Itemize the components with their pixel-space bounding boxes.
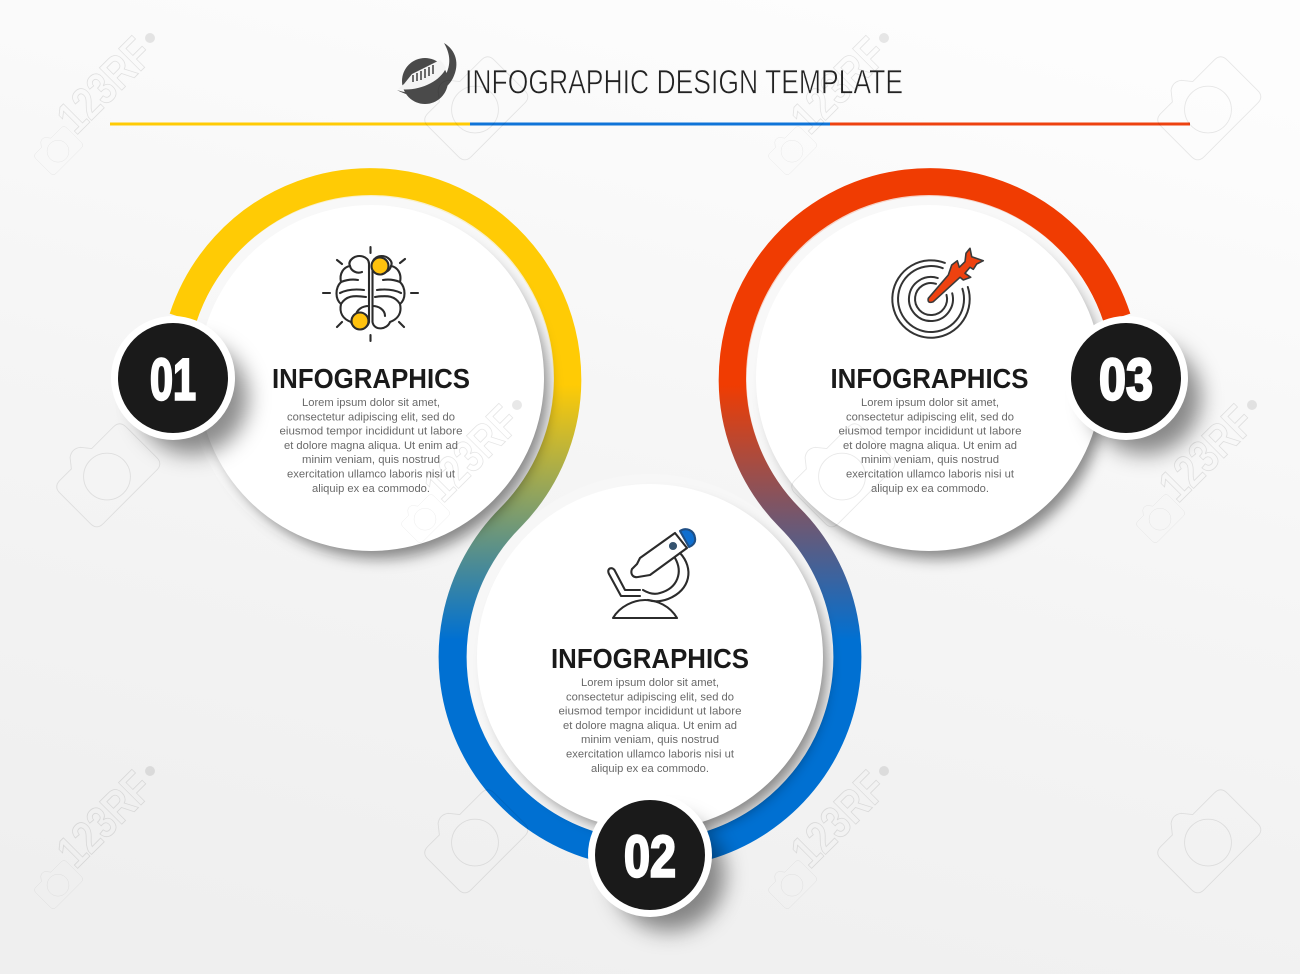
body text 2: aliquip ex ea commodo. (591, 763, 709, 775)
body text 3: exercitation ullamco laboris nisi ut (846, 468, 1015, 480)
number badge 01 (111, 316, 248, 454)
panel 2: disc (467, 474, 833, 840)
header logo icon (397, 43, 456, 104)
body text 1 (280, 397, 462, 495)
icon: brain (323, 247, 418, 341)
body text 1: minim veniam, quis nostrud (302, 454, 440, 466)
number badge 03: 03 (1099, 348, 1153, 412)
body text 3: aliquip ex ea commodo. (871, 483, 989, 495)
stock watermarks: 123RF (46, 761, 162, 877)
number badge 02 (588, 793, 725, 931)
body text 2: Lorem ipsum dolor sit amet, (581, 677, 719, 689)
body text 2: minim veniam, quis nostrud (581, 734, 719, 746)
body text 1: exercitation ullamco laboris nisi ut (287, 468, 456, 480)
panel 3 text (830, 363, 1028, 495)
stock watermarks: 123RF (413, 395, 529, 511)
stock watermarks: 123RF (1148, 395, 1264, 511)
panel 2 text (551, 643, 749, 775)
panel 1 text (272, 363, 470, 495)
body text 2: consectetur adipiscing elit, sed do (566, 691, 734, 703)
body text 3: consectetur adipiscing elit, sed do (846, 411, 1014, 423)
body text 1: eiusmod tempor incididunt ut labore (280, 426, 462, 438)
panel 3: disc (746, 195, 1112, 561)
body text 3: eiusmod tempor incididunt ut labore (838, 426, 1022, 438)
number badge 01: 01 (150, 348, 196, 412)
stock watermarks: 123RF (780, 27, 896, 143)
panel 1: disc (188, 195, 554, 561)
stock watermarks: 123RF (46, 27, 162, 143)
body text 1: aliquip ex ea commodo. (312, 483, 430, 495)
heading 1: INFOGRAPHICS (272, 363, 470, 394)
body text 2: exercitation ullamco laboris nisi ut (566, 748, 735, 760)
icon: target with arrow (892, 248, 983, 338)
body text 1: Lorem ipsum dolor sit amet, (302, 397, 440, 409)
stock watermarks: 123RF (780, 761, 896, 877)
title: INFOGRAPHIC DESIGN TEMPLATE (465, 64, 903, 102)
number badge 03 (1064, 316, 1201, 454)
body text 3: et dolore magna aliqua. Ut enim ad (843, 440, 1017, 452)
heading 3: INFOGRAPHICS (830, 363, 1028, 394)
body text 3: minim veniam, quis nostrud (861, 454, 999, 466)
header tri-colour rule (110, 122, 1190, 126)
body text 2: et dolore magna aliqua. Ut enim ad (563, 720, 737, 732)
body text 1: consectetur adipiscing elit, sed do (287, 411, 455, 423)
body text 3: Lorem ipsum dolor sit amet, (861, 397, 999, 409)
heading 2: INFOGRAPHICS (551, 643, 749, 674)
body text 1: et dolore magna aliqua. Ut enim ad (284, 440, 458, 452)
icon: microscope (608, 529, 695, 618)
number badge 02: 02 (624, 824, 676, 890)
body text 2 (558, 677, 742, 775)
continuous gradient ribbon (183, 182, 1117, 854)
body text 2: eiusmod tempor incididunt ut labore (558, 706, 742, 718)
body text 3 (838, 397, 1022, 495)
